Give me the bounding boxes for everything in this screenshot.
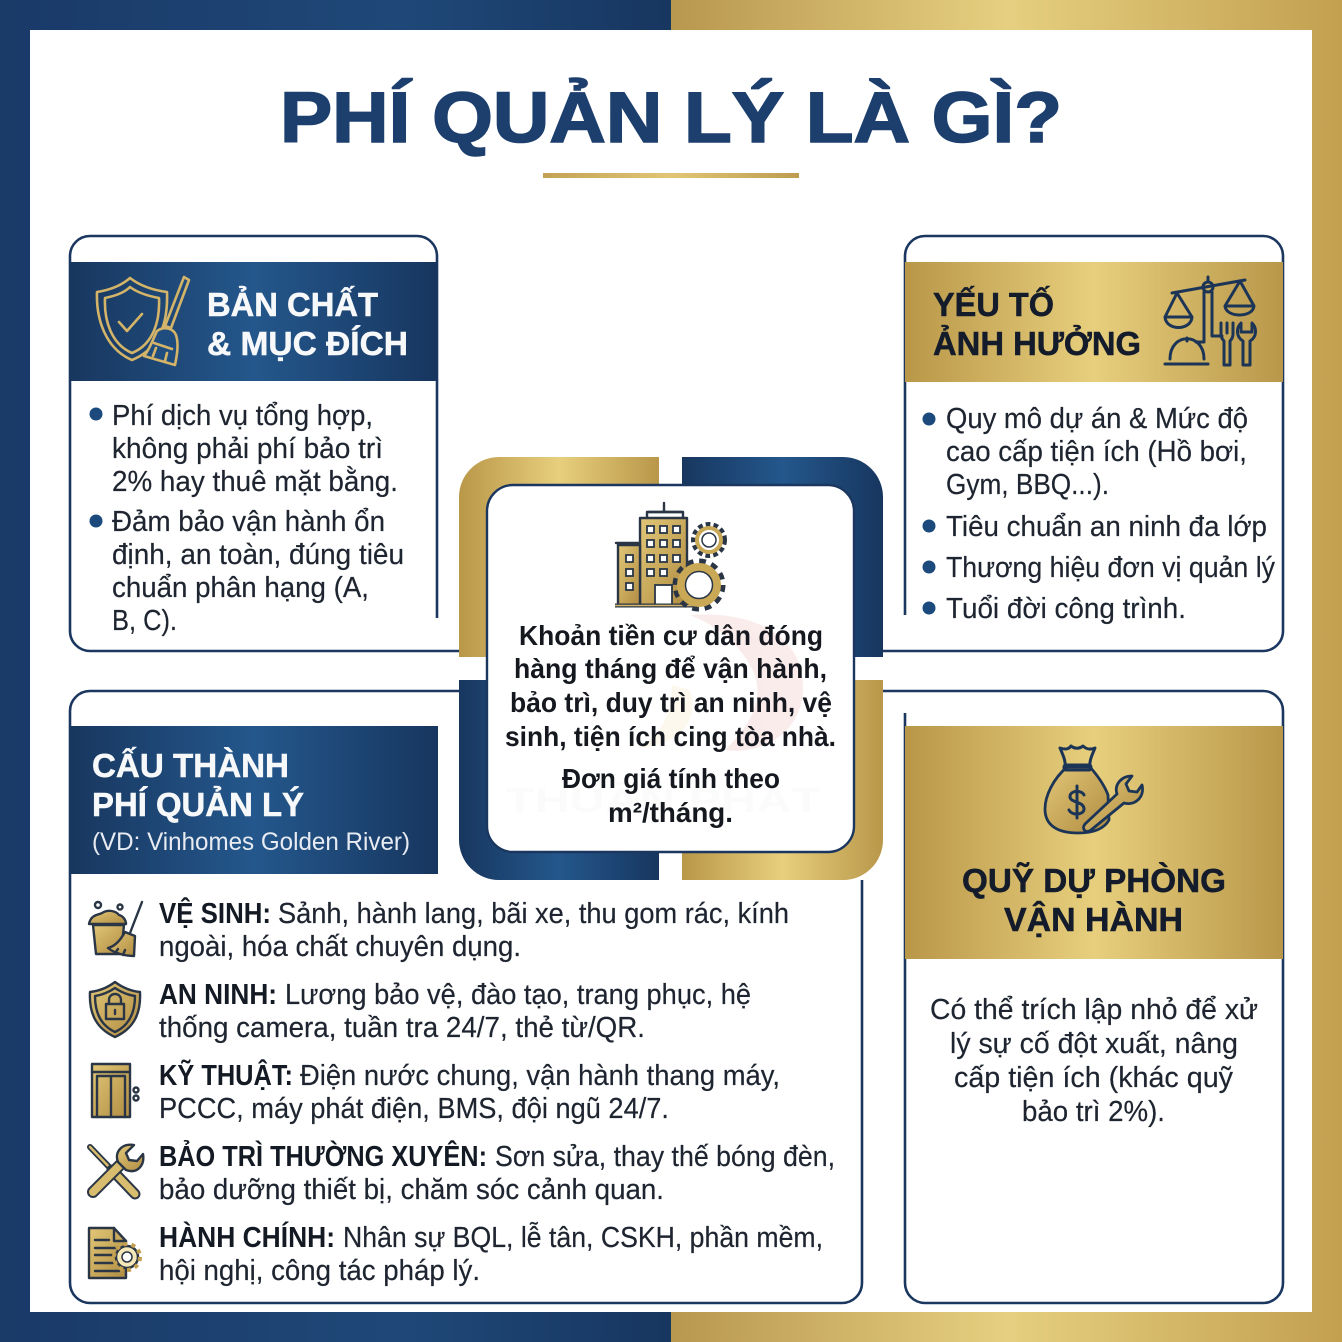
item text: kỹ thuật: Điện nước chung, vận hành thang máy, [300, 1060, 780, 1092]
center text: Đơn giá tính theo [562, 763, 780, 794]
bullet list: bản chất: định, an toàn, đúng tiêu [112, 539, 404, 571]
title: PHÍ QUẢN LÝ LÀ GÌ? [280, 79, 1062, 158]
bullet list: yếu tố: Quy mô dự án & Mức độ [946, 403, 1248, 435]
body text: quỹ dự phòng [930, 994, 1258, 1128]
item text: kỹ thuật: KỸ THUẬT: [159, 1060, 293, 1092]
header text: quỹ dự phòng [962, 862, 1226, 938]
item text: bảo trì: Sơn sửa, thay thế bóng đèn, [495, 1141, 835, 1173]
bullet list: yếu tố: Gym, BBQ...). [946, 469, 1109, 501]
header text: bản chất [207, 286, 408, 362]
bullet list: bản chất: Phí dịch vụ tổng hợp, [112, 400, 373, 432]
icon: elevator [92, 1064, 138, 1117]
center text: Khoản tiền cư dân đóng [519, 620, 823, 651]
bullet list: bản chất: 2% hay thuê mặt bằng. [112, 466, 398, 498]
header band: quỹ dự phòng [905, 726, 1283, 959]
body text: quỹ dự phòng: Có thể trích lập nhỏ để xử [930, 994, 1258, 1026]
title underline [543, 173, 799, 178]
header band: bản chất [70, 262, 437, 381]
bullet list: bản chất: Đảm bảo vận hành ổn [112, 506, 385, 538]
bullet list: yếu tố [922, 403, 1276, 625]
item text: vệ sinh [159, 898, 789, 963]
panel: cấu thành phí quản lý [70, 691, 862, 1303]
bullet list: yếu tố: cao cấp tiện ích (Hồ bơi, [946, 436, 1247, 468]
body text: quỹ dự phòng: lý sự cố đột xuất, nâng [950, 1028, 1238, 1060]
item text: hành chính: Nhân sự BQL, lễ tân, CSKH, phần mềm, [343, 1222, 823, 1254]
item text: an ninh: AN NINH: [159, 979, 277, 1011]
icon: money bag and wrench [1045, 746, 1143, 833]
item text: an ninh [159, 979, 751, 1044]
header text: bản chất: & MỤC ĐÍCH [207, 325, 408, 362]
header text: bản chất: BẢN CHẤT [207, 286, 378, 323]
icon: document with gear [89, 1228, 140, 1278]
bullet list: bản chất: B, C). [112, 605, 177, 637]
icon: shield and broom [97, 277, 189, 365]
item text: kỹ thuật [159, 1060, 780, 1125]
bullet list: yếu tố: Tuổi đời công trình. [946, 593, 1186, 625]
header text: cấu thành: (VD: Vinhomes Golden River) [92, 828, 410, 856]
center panel: definition [459, 457, 883, 880]
watermark logo: THUẬN PHÁT [505, 782, 821, 820]
header text: quỹ dự phòng: QUỸ DỰ PHÒNG [962, 862, 1226, 899]
icon: scales, cloche and tools [1165, 277, 1256, 365]
icon: shield with padlock [90, 982, 140, 1037]
body text: quỹ dự phòng: cấp tiện ích (khác quỹ [954, 1062, 1234, 1094]
icon: building with gears [615, 503, 724, 608]
header text: yếu tố: ẢNH HƯỞNG [933, 325, 1141, 362]
panel: bản chất và mục đích [70, 236, 459, 651]
center text: bảo trì, duy trì an ninh, vệ [510, 687, 832, 718]
center text: sinh, tiện ích cing tòa nhà. [505, 721, 836, 752]
bullet list: bản chất: không phải phí bảo trì [112, 433, 383, 465]
center text [505, 620, 836, 828]
item text: hành chính [159, 1222, 823, 1287]
bullet list: yếu tố: Tiêu chuẩn an ninh đa lớp [946, 511, 1267, 543]
icon: bucket and broom [89, 902, 142, 956]
icon: crossed wrench and screwdriver [90, 1145, 143, 1194]
bullet list: bản chất [90, 400, 404, 637]
body text: quỹ dự phòng: bảo trì 2%). [1022, 1096, 1165, 1128]
header text: yếu tố [933, 285, 1141, 362]
bullet list: yếu tố: Thương hiệu đơn vị quản lý [946, 552, 1276, 584]
item text: an ninh: Lương bảo vệ, đào tạo, trang phục, hệ [285, 979, 751, 1011]
header text: cấu thành [92, 747, 410, 856]
item text: an ninh: thống camera, tuần tra 24/7, thẻ từ/QR. [159, 1012, 645, 1044]
item text: vệ sinh: ngoài, hóa chất chuyên dụng. [159, 931, 521, 963]
item text: kỹ thuật: PCCC, máy phát điện, BMS, đội ngũ 24/7. [159, 1093, 669, 1125]
watermark logo [505, 614, 821, 820]
header text: quỹ dự phòng: VẬN HÀNH [1004, 901, 1183, 938]
item text: bảo trì: BẢO TRÌ THƯỜNG XUYÊN: [159, 1140, 487, 1173]
header band: yếu tố [905, 262, 1283, 382]
center text: hàng tháng để vận hành, [514, 653, 827, 684]
panel: yếu tố ảnh hưởng [883, 236, 1283, 651]
center text: m²/tháng. [608, 797, 733, 828]
panel: quỹ dự phòng vận hành [883, 691, 1283, 1303]
item text: vệ sinh: VỆ SINH: [159, 898, 271, 930]
item text: hành chính: hội nghị, công tác pháp lý. [159, 1255, 480, 1287]
item text: hành chính: HÀNH CHÍNH: [159, 1222, 335, 1254]
item text: vệ sinh: Sảnh, hành lang, bãi xe, thu gom rác, kính [278, 898, 789, 930]
header text: cấu thành: PHÍ QUẢN LÝ [92, 786, 304, 823]
header text: yếu tố: YẾU TỐ [933, 285, 1054, 323]
item text: bảo trì: bảo dưỡng thiết bị, chăm sóc cảnh quan. [159, 1174, 664, 1206]
header band: cấu thành [70, 726, 438, 874]
bullet list: bản chất: chuẩn phân hạng (A, [112, 572, 369, 604]
item text: bảo trì [159, 1140, 835, 1206]
header text: cấu thành: CẤU THÀNH [92, 747, 289, 784]
